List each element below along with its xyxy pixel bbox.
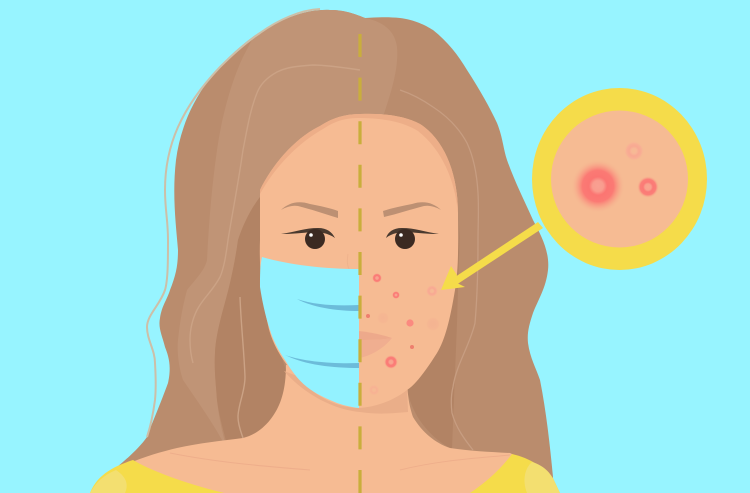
- magnifier ring: [532, 88, 707, 270]
- left eye: [281, 228, 335, 249]
- right eye: [386, 228, 439, 249]
- shirt right: [470, 454, 560, 493]
- sleeve highlight right: [525, 462, 560, 493]
- nose line: [347, 254, 349, 269]
- hair: [110, 9, 553, 493]
- neck and chest: [90, 365, 560, 493]
- mask: [260, 257, 359, 408]
- forehead hairline shadow: [260, 114, 458, 213]
- mask pleat bottom: [285, 355, 359, 368]
- shirt left: [90, 460, 224, 493]
- medium pimple: [637, 176, 659, 198]
- magnified skin: [551, 110, 688, 248]
- right eyebrow: [383, 202, 441, 217]
- loose hair outline: [147, 9, 320, 437]
- face: [260, 114, 458, 408]
- hair dark inner left: [215, 197, 287, 441]
- sleeve highlight left: [90, 470, 127, 493]
- hair strand highlights left: [190, 65, 360, 438]
- dashed centre line: [358, 34, 362, 493]
- pale pimple: [624, 141, 644, 161]
- left eyebrow: [281, 202, 338, 218]
- hair light strand: [178, 10, 397, 452]
- acne spots: [366, 273, 440, 396]
- collarbones: [170, 453, 510, 470]
- hair strand highlights right: [400, 90, 478, 450]
- hair dark inner right: [407, 225, 460, 449]
- magnifier circle: [532, 88, 707, 270]
- mask body: [260, 257, 359, 408]
- lips: [358, 331, 392, 358]
- neck shadow: [284, 371, 408, 414]
- hair back shape: [110, 10, 553, 493]
- arrow: [441, 222, 543, 290]
- mask pleat top: [297, 299, 359, 311]
- large pimple: [571, 159, 625, 213]
